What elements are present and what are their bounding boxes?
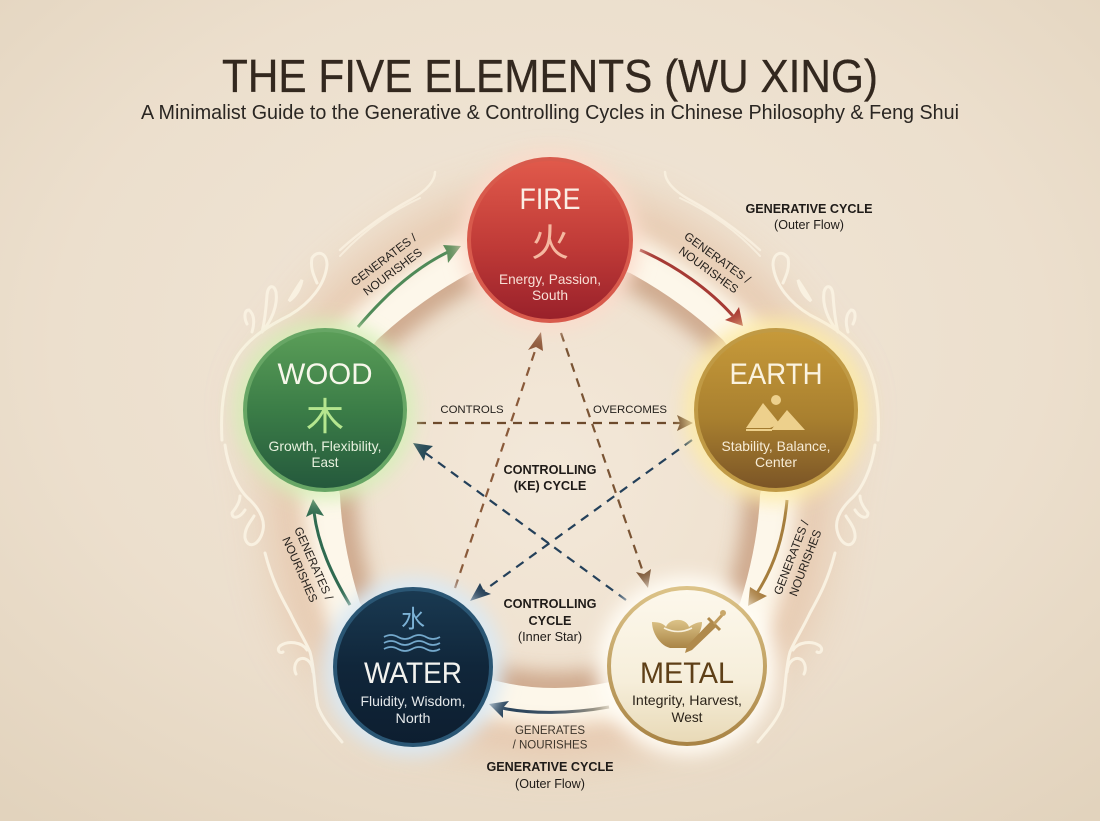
ring band and glow	[325, 250, 776, 688]
circle: water: Fluidity, Wisdom,	[360, 693, 466, 709]
label: generative outer flow top: (Outer Flow)	[774, 218, 844, 232]
label: generative outer flow bottom: GENERATIVE CYCLE	[486, 760, 614, 774]
circle: fire: FIRE	[520, 183, 580, 216]
circle: earth: EARTH	[730, 358, 822, 391]
label: generative outer flow bottom: (Outer Flow)	[515, 777, 585, 791]
circle: wood: East	[312, 454, 339, 470]
label: controlling ke cycle: (KE) CYCLE	[514, 479, 586, 493]
label: generative outer flow top: GENERATIVE CYCLE	[745, 202, 873, 216]
generative labels: GENERATES /	[771, 518, 812, 597]
controlling arrowheads	[413, 332, 693, 601]
controlling labels	[440, 404, 667, 416]
generative arrows	[314, 250, 787, 712]
generative labels: GENERATES /	[348, 230, 420, 289]
generative labels: NOURISHES	[676, 244, 741, 296]
label: controlling inner star: (Inner Star)	[518, 630, 582, 644]
circle: fire: Energy, Passion,	[499, 271, 601, 287]
generative labels: NOURISHES	[786, 528, 824, 598]
circle: water: WATER	[364, 657, 462, 690]
circle: fire: 火	[531, 223, 569, 265]
circle: wood: Growth, Flexibility,	[268, 438, 382, 454]
circle: wood: WOOD	[278, 358, 372, 391]
decorative flourishes, left	[222, 172, 435, 742]
generative labels	[278, 229, 826, 752]
circle: wood: 木	[306, 397, 344, 439]
label: controlling inner star: CYCLE	[528, 614, 572, 628]
controlling labels: OVERCOMES	[593, 404, 667, 416]
circle: metal: Integrity, Harvest,	[632, 692, 742, 708]
generative labels: GENERATES	[515, 725, 585, 737]
circle: metal: METAL	[640, 657, 734, 690]
circle: wood	[235, 320, 415, 500]
icon: ingot and sword	[652, 610, 726, 653]
circle: water: 水	[401, 606, 425, 633]
circle: metal	[597, 576, 777, 756]
circle: earth: Stability, Balance,	[722, 438, 830, 454]
circle: earth	[684, 318, 868, 502]
generative labels: NOURISHES	[279, 535, 321, 604]
circle: water	[323, 577, 503, 757]
circle: fire: South	[532, 287, 568, 303]
controlling labels: CONTROLS	[440, 404, 504, 416]
circle: metal: West	[672, 709, 703, 725]
generative labels: GENERATES /	[291, 525, 336, 603]
generative labels: / NOURISHES	[513, 740, 588, 752]
generative arrowheads	[306, 245, 767, 718]
subtitle: A Minimalist Guide to the Generative & Controlling Cycles in Chinese Philosophy & Feng Shui	[141, 101, 959, 124]
title: THE FIVE ELEMENTS (WU XING)	[222, 50, 878, 102]
generative labels: NOURISHES	[360, 245, 425, 298]
circle: earth: Center	[755, 454, 797, 470]
decorative flourishes, right	[665, 172, 878, 742]
circle: fire	[460, 150, 640, 330]
circle: water: North	[396, 710, 430, 726]
generative labels: GENERATES /	[682, 229, 754, 287]
controlling cycle star arrows	[417, 333, 692, 600]
label: controlling inner star: CONTROLLING	[503, 597, 597, 611]
label: controlling ke cycle: CONTROLLING	[503, 463, 597, 477]
